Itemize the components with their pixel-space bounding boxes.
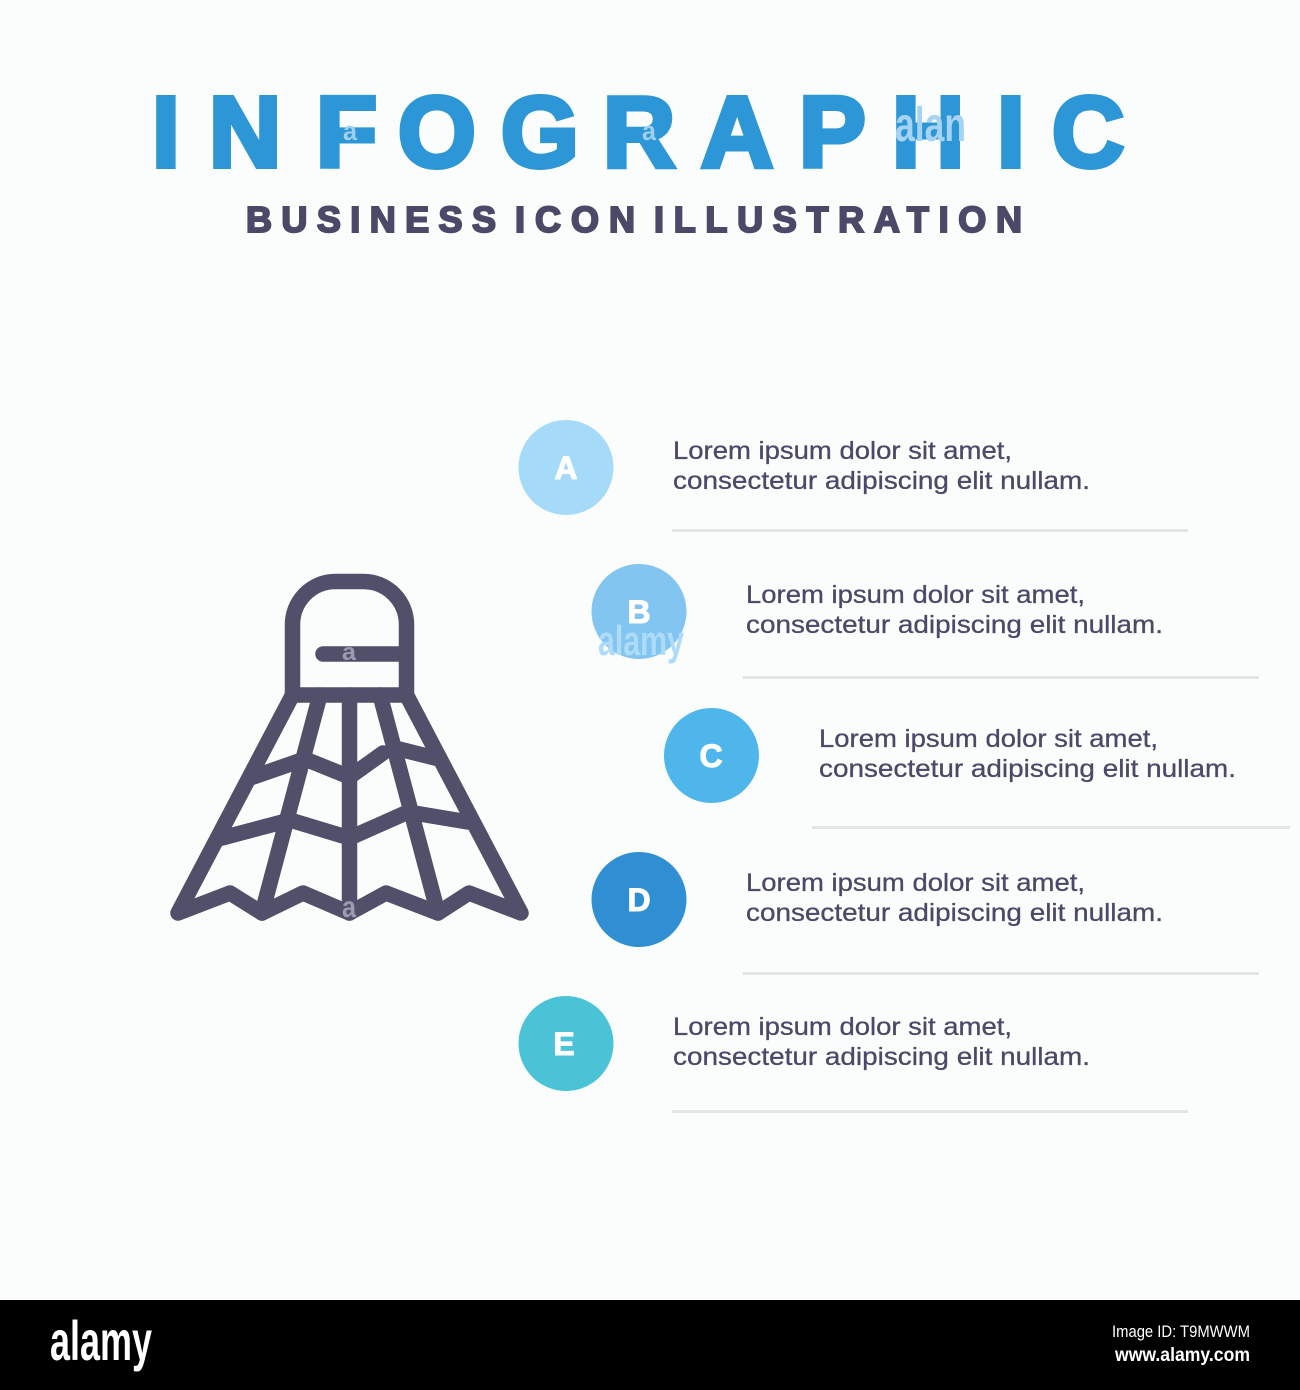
step B: B	[627, 594, 651, 630]
footer bar: Image ID: T9MWWM	[1112, 1322, 1250, 1341]
step B	[592, 564, 1259, 679]
icon: shuttlecock	[178, 582, 521, 924]
step E: Lorem ipsum dolor sit amet,	[673, 1013, 1012, 1041]
title: a	[642, 116, 657, 146]
footer bar: www.alamy.com	[1114, 1345, 1250, 1366]
step C: Lorem ipsum dolor sit amet,	[819, 725, 1158, 753]
step D: D	[627, 882, 651, 918]
step E: consectetur adipiscing elit nullam.	[673, 1043, 1090, 1071]
icon: shuttlecock: a	[342, 639, 357, 666]
title: INFOGRAPHIC	[152, 76, 1124, 188]
step C: consectetur adipiscing elit nullam.	[819, 755, 1236, 783]
title: alan	[895, 99, 966, 152]
step A: A	[554, 450, 578, 486]
icon: shuttlecock: a	[342, 891, 356, 924]
step C: C	[699, 738, 723, 774]
step B: consectetur adipiscing elit nullam.	[746, 611, 1163, 639]
footer bar: alamy	[50, 1309, 152, 1372]
step D	[592, 852, 1259, 975]
subtitle: ILLUSTRATION	[654, 199, 1022, 240]
step A: consectetur adipiscing elit nullam.	[673, 467, 1090, 495]
step A: Lorem ipsum dolor sit amet,	[673, 437, 1012, 465]
subtitle: BUSINESS	[246, 199, 496, 240]
footer bar	[0, 1300, 1300, 1390]
step C	[664, 708, 1290, 829]
step D: consectetur adipiscing elit nullam.	[746, 899, 1163, 927]
title: a	[343, 116, 358, 146]
step B: alamy	[598, 617, 684, 664]
step A	[518, 420, 1188, 532]
step B: Lorem ipsum dolor sit amet,	[746, 581, 1085, 609]
subtitle: ICON	[515, 199, 635, 240]
step E: E	[553, 1026, 575, 1062]
subtitle	[246, 199, 1022, 240]
step E	[518, 996, 1188, 1113]
step D: Lorem ipsum dolor sit amet,	[746, 869, 1085, 897]
